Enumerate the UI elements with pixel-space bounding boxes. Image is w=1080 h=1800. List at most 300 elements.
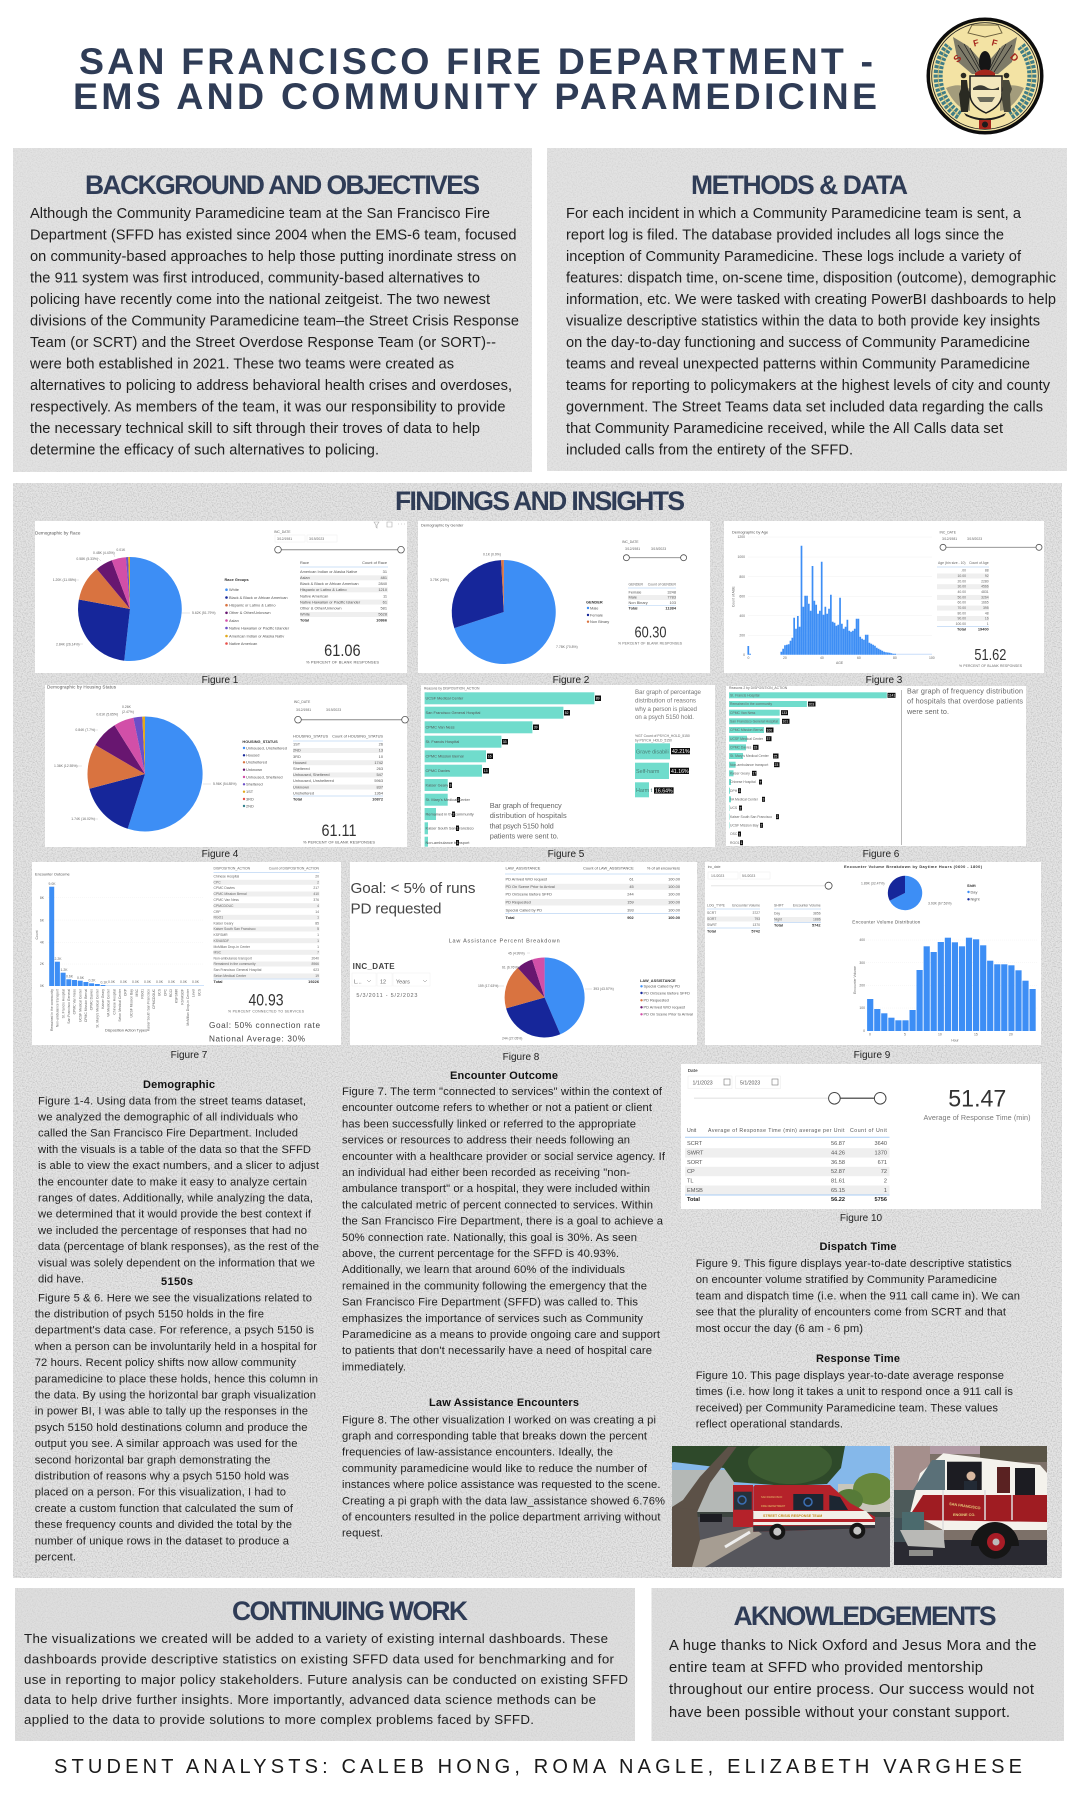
stat: 61.11 blank responses: % PERCENT OF BLANK RESPONSES bbox=[303, 840, 375, 845]
bar chart: disposition action types: RGO1 bbox=[141, 989, 145, 999]
date slicer: 3/19/2023 bbox=[309, 537, 324, 541]
date slicer: 3/12/1981 bbox=[625, 547, 640, 551]
text block: dispatch time: Figure 9. This figure displays year-to-date descriptive statistics bbox=[696, 1258, 1012, 1270]
figure 1: demographic by race dashboard: 5.62K (51.79%) bbox=[192, 611, 216, 615]
data table: law assistance: 902 bbox=[627, 915, 635, 920]
bar chart: encounter volume by hour bbox=[853, 938, 1038, 1042]
bar chart: overdose destinations bbox=[729, 692, 896, 845]
data table: age: 4566 bbox=[981, 585, 989, 589]
data table: age: 395 bbox=[983, 606, 989, 610]
figure 2: demographic by gender dashboard: 7.78K (70.8%) bbox=[556, 645, 578, 649]
text block: demographic: visual was solely dependent on the information that we bbox=[38, 1257, 315, 1269]
data table: age: Age (bin size - 10) bbox=[938, 561, 966, 565]
text block: law assistance: instances where police assistance was requested to the scene. bbox=[342, 1479, 660, 1491]
text block: demographic: we included the percentage of responses that had no bbox=[37, 1225, 307, 1237]
data table: shift: Day bbox=[774, 912, 780, 916]
bar chart: disposition action types: 9.0K bbox=[48, 882, 56, 886]
text block: acknowledgements: have been possible without your constant support. bbox=[669, 1705, 1010, 1721]
caption: figure 9: Figure 9 bbox=[854, 1050, 891, 1061]
data table: law assistance: 100.00 bbox=[668, 915, 680, 920]
legend: housing status: Unhoused, Unsheltered bbox=[246, 745, 287, 750]
text block: 5150s: percent. bbox=[35, 1552, 76, 1564]
histogram: age: 100 bbox=[929, 656, 935, 660]
data table: disposition: 85 bbox=[315, 922, 319, 926]
legend: law assistance: PD OnScene Before SFFD bbox=[644, 990, 690, 995]
histogram: age: 800 bbox=[739, 575, 745, 579]
text block: 5150s: 72 hours. Recent policy shifts now allow community bbox=[35, 1357, 296, 1369]
text block: encounter outcome: the San Francisco Fire Department, there is a goal to achieve a bbox=[342, 1216, 664, 1228]
data table: response time by unit: SWRT bbox=[687, 1151, 704, 1157]
text: law assistance goal bbox=[350, 880, 476, 918]
text block: acknowledgements: throughout our entire process. Our success would not bbox=[669, 1682, 1034, 1698]
data table: housing status: Total bbox=[293, 796, 302, 801]
heading: methods and data: METHODS & DATA bbox=[691, 170, 908, 200]
bar chart: hospital frequency: 52 bbox=[565, 711, 569, 715]
figure 2: demographic by gender dashboard: 0.1K (0.9%) bbox=[483, 552, 501, 556]
data table: disposition bbox=[214, 867, 320, 984]
bar chart: hospital frequency: CPMC Mission Bernal bbox=[426, 754, 464, 759]
data table: age: 1 bbox=[987, 622, 989, 626]
text: hospital bar graph note: distribution of hospitals bbox=[490, 811, 567, 820]
bar chart: disposition action types: KSFSMR bbox=[175, 988, 179, 1003]
data table: law assistance: PD Requested bbox=[506, 900, 531, 905]
text block: encounter outcome: above, the current percentage for the SFFD is 40.93%. bbox=[342, 1248, 619, 1260]
data table: disposition: San Francisco General Hospital bbox=[214, 968, 262, 972]
text: overdose bar graph note bbox=[906, 686, 1023, 716]
legend: gender: Male bbox=[590, 605, 598, 610]
histogram: age: 0 bbox=[748, 656, 750, 660]
data table: housing status: 837 bbox=[376, 784, 383, 789]
heading: demographic: Demographic bbox=[143, 1079, 215, 1091]
data table: housing status bbox=[293, 733, 384, 801]
data table: law assistance: % of all encounters bbox=[647, 866, 680, 870]
text block: law assistance: request. bbox=[342, 1528, 383, 1540]
date slicer: INC_DATE bbox=[294, 700, 311, 704]
data table: age: 90.00 bbox=[958, 617, 966, 621]
figure 5: psych 5150 hold bar charts: Reasons by DISPOSITION_ACTION bbox=[424, 686, 480, 690]
caption: figure 8: Figure 8 bbox=[503, 1052, 540, 1063]
data table: response time by unit: TL bbox=[687, 1179, 694, 1185]
bar chart: hospital frequency: Kaiser South San Francisco bbox=[426, 826, 474, 831]
text block: law assistance: graph and corresponding table that breaks down the percent bbox=[342, 1430, 648, 1442]
figure 5: psych 5150 hold bar charts bbox=[421, 685, 715, 847]
bar chart: overdose destinations: DPH bbox=[730, 789, 738, 793]
figure 7: encounter outcome dashboard bbox=[32, 862, 341, 1045]
data table: law assistance: 100.00 bbox=[668, 892, 681, 897]
data table: law assistance: PD On Scene Prior to Arrival bbox=[506, 884, 555, 889]
text block: encounter outcome: encounter with a healthcare provider or social service agency. If bbox=[342, 1151, 666, 1163]
panel: acknowledgements bbox=[652, 1588, 1064, 1741]
data table: disposition: 1 bbox=[317, 916, 319, 920]
caption: figure 5: Figure 5 bbox=[548, 849, 585, 860]
bar chart: hold reasons percent: %GT Count of PSYCH_HOLD_5150 bbox=[635, 734, 690, 738]
bar chart: disposition action types: Seton Medical Center bbox=[118, 988, 122, 1022]
bar chart: disposition action types: 0.5K bbox=[77, 976, 85, 980]
bar chart: hospital frequency: 39 bbox=[534, 726, 538, 730]
data table: shift: Total bbox=[774, 922, 783, 928]
text block: encounter outcome: ambulance transport" or a hospital, they were included within bbox=[342, 1183, 650, 1195]
data table: housing status: 547 bbox=[376, 772, 383, 777]
figure 4: demographic by housing status dashboard bbox=[45, 684, 408, 847]
bar chart: hospital frequency: 3 bbox=[450, 784, 452, 788]
figure 3: demographic by age dashboard bbox=[724, 521, 1044, 673]
bar chart: overdose destinations: OSC bbox=[730, 832, 738, 836]
panel: methods and data bbox=[547, 148, 1067, 471]
bar chart: disposition action types: Non-ambulance transport bbox=[56, 989, 60, 1027]
bar chart: encounter volume by hour: Hour bbox=[951, 1038, 960, 1042]
bar chart: overdose destinations: 2 bbox=[776, 815, 778, 819]
figure 3: demographic by age dashboard: Demographic by Age bbox=[732, 529, 768, 534]
figure 1: demographic by race dashboard: 0.58K (5.33%) bbox=[76, 557, 98, 561]
date slicer: 3/19/2023 bbox=[326, 708, 341, 712]
text block: background: the necessary technical skill to sift through their troves of data to help bbox=[30, 421, 480, 437]
bar chart: encounter volume by hour: 15 bbox=[974, 1032, 978, 1036]
bar chart: disposition action types: UCS bbox=[158, 988, 162, 996]
data table: disposition: Total bbox=[214, 979, 223, 984]
text block: encounter outcome bbox=[342, 1086, 666, 1373]
data table: housing status: Housed bbox=[293, 760, 306, 765]
bar chart: disposition action types: 0.2K bbox=[88, 978, 96, 982]
data table: response time by unit: SCRT bbox=[687, 1141, 703, 1147]
bar chart: disposition action types: CPMC Davies bbox=[90, 989, 94, 1010]
text block: continuing work: The visualizations we created will be added to a variety of existing internal dashboards. These bbox=[24, 1631, 608, 1646]
data table: disposition: 410 bbox=[313, 892, 319, 896]
text block: response time bbox=[696, 1370, 1013, 1431]
data table: race: Other & Other/Unknown bbox=[300, 606, 342, 611]
histogram: age: 80 bbox=[893, 656, 897, 660]
date slicer: 3/19/2023 bbox=[651, 547, 666, 551]
bar chart: overdose destinations: UCSF Mission Bay bbox=[730, 824, 759, 828]
text block: methods: report log is filed. The database provided includes all logs since the bbox=[566, 228, 1004, 244]
text block: methods: government. The Street Teams data set included data regarding the calls bbox=[566, 400, 1043, 416]
data table: log type: 5742 bbox=[751, 928, 761, 933]
text: reasons bar graph note: on a psych 5150 hold. bbox=[635, 714, 694, 721]
bar chart: hospital frequency: St. Francis Hospital bbox=[426, 739, 459, 744]
bar chart: disposition action types: 0.0K bbox=[168, 980, 176, 984]
date slicer: 5/1/2023 bbox=[740, 1080, 760, 1086]
stat: 51.47 average response time bbox=[924, 1086, 1030, 1122]
text block: 5150s: number of unique rows in the dataset to produce a bbox=[35, 1535, 290, 1547]
photo: street crisis response ambulance: FIRE DEPARTMENT bbox=[761, 1504, 786, 1508]
pie chart: gender bbox=[452, 560, 556, 664]
legend: race groups: Race Groups bbox=[224, 577, 249, 582]
figure 4: demographic by housing status dashboard: 0.84K (7.7%) bbox=[75, 728, 95, 732]
bar chart: disposition action types: 4K bbox=[40, 940, 45, 944]
data table: race: Asian bbox=[300, 575, 310, 580]
data table: race: Count of Race bbox=[362, 560, 387, 565]
text block: methods: visualize descriptive statistics within the data to both provide key insights bbox=[566, 314, 1040, 330]
bar chart: disposition action types: 0.0K bbox=[132, 980, 140, 984]
caption: figure 7: Figure 7 bbox=[171, 1050, 208, 1061]
data table: gender bbox=[628, 582, 677, 611]
data table: log type: 1370 bbox=[752, 923, 760, 927]
histogram: age: 400 bbox=[739, 614, 745, 618]
text block: response time: times (i.e. how long it takes a unit to respond once a 911 call is bbox=[696, 1386, 1013, 1398]
text: reasons bar graph note: why a person is placed bbox=[634, 706, 698, 713]
bar chart: overdose destinations: CPMC Van Ness bbox=[730, 711, 756, 715]
bar chart: overdose destinations: VA Medical Center bbox=[730, 798, 759, 802]
text block: demographic: we determined that it would provide the best context if bbox=[37, 1209, 312, 1221]
data table: disposition: CPMCDOUC bbox=[214, 904, 234, 908]
bar chart: disposition action types: UCS bbox=[197, 988, 201, 996]
data table: disposition: CRP bbox=[214, 910, 221, 914]
data table: response time by unit: 671 bbox=[878, 1160, 887, 1166]
legend: housing status: HOUSING_STATUS bbox=[242, 739, 278, 744]
data table: disposition: Remained in the community bbox=[214, 962, 256, 966]
data table: response time by unit: 65.15 bbox=[831, 1188, 845, 1194]
data table: housing status: 13 bbox=[379, 748, 383, 753]
text block: 5150s: paramedicine to place these holds, hence this column in bbox=[35, 1373, 318, 1385]
date slicer: INC_DATE bbox=[622, 540, 639, 544]
data table: disposition: CPC bbox=[214, 880, 221, 884]
data table: law assistance bbox=[505, 866, 681, 920]
heading: law assistance encounters: Law Assistance Encounters bbox=[429, 1397, 579, 1409]
figure 9: encounter volume dashboard: Encounter Volume Distribution bbox=[852, 920, 921, 924]
bar chart: hold reasons percent: Grave disabili bbox=[636, 749, 669, 755]
stat: 61.11 blank responses bbox=[303, 822, 375, 845]
photo: street crisis response ambulance: STREET CRISIS RESPONSE TEAM bbox=[763, 1514, 822, 1518]
data table: law assistance: 100.00 bbox=[668, 900, 681, 905]
bar chart: overdose destinations: Remained in the community bbox=[730, 702, 772, 706]
stat: 60.30 blank responses: 60.30 bbox=[634, 625, 667, 642]
legend: shift: Night bbox=[970, 897, 981, 902]
data table: law assistance: 393 bbox=[627, 907, 634, 912]
figure 9: encounter volume dashboard: 1.89K (32.47%) bbox=[861, 882, 885, 886]
data table: disposition: 217 bbox=[313, 886, 319, 890]
text block: methods bbox=[566, 206, 1056, 458]
bar chart: overdose destinations: 3 bbox=[762, 798, 764, 802]
text block: demographic: did have. bbox=[38, 1274, 84, 1286]
stat: 61.11 blank responses: 61.11 bbox=[322, 822, 356, 840]
data table: disposition: 8966 bbox=[311, 962, 319, 966]
text block: 5150s: when a person can be involuntarily held in a hospital for bbox=[34, 1341, 317, 1353]
text: connection goal: Goal: 50% connection rate bbox=[209, 1021, 320, 1030]
text block: demographic: with the visuals is a table of the data so that the SFFD bbox=[37, 1144, 311, 1156]
data table: age: 70.00 bbox=[958, 606, 966, 610]
data table: log type: Encounter Volume bbox=[732, 903, 760, 907]
date filter: INC_DATE: Years bbox=[396, 980, 410, 986]
caption: figure 3: Figure 3 bbox=[866, 675, 903, 686]
data table: housing status: Unhoused, Unsheltered bbox=[293, 778, 334, 783]
text block: 5150s: department's data case. For reference, a psych 5150 is bbox=[35, 1325, 314, 1337]
bar chart: overdose destinations: 100 bbox=[766, 728, 772, 732]
bar chart: hospital frequency: St. Mary's Medical Center bbox=[426, 797, 471, 802]
legend: housing status: Unknown bbox=[246, 767, 262, 772]
stat: 40.93 connected to services bbox=[228, 991, 305, 1013]
data table: response time by unit bbox=[685, 1128, 890, 1203]
figure 8: law assistance dashboard: 45 (4.99%) bbox=[508, 952, 525, 956]
text block: 5150s: in power BI, I was able to tally up the responses in the bbox=[35, 1406, 308, 1418]
data table: shift: Encounter Volume bbox=[793, 903, 821, 907]
data table: disposition: 19226 bbox=[308, 979, 320, 984]
bar chart: overdose destinations: St. Francis Hospital bbox=[730, 694, 760, 698]
histogram: age: 600 bbox=[739, 594, 745, 598]
data table: disposition: 1 bbox=[317, 939, 319, 943]
bar chart: disposition action types: MSC bbox=[135, 988, 139, 997]
pie chart: law assistance bbox=[505, 957, 585, 1038]
text block: dispatch time: team and dispatch time (i.e. when the 911 call came in). We can bbox=[696, 1290, 1020, 1302]
text block: law assistance: frequencies of law-assistance encounters. Ideally, the bbox=[342, 1447, 613, 1459]
data table: housing status: 5963 bbox=[374, 778, 383, 783]
text block: encounter outcome: San Francisco Fire Department (SFFD) was called to. This bbox=[342, 1297, 638, 1309]
caption: figure 10: Figure 10 bbox=[840, 1213, 883, 1224]
figure 8: law assistance dashboard: 159 (17.63%) bbox=[478, 984, 498, 988]
heading: 5150s: 5150s bbox=[161, 1276, 193, 1288]
text block: 5150s: second horizontal bar graph demonstrating the bbox=[35, 1454, 271, 1466]
data table: law assistance: Count of LAW_ASSISTANCE bbox=[583, 866, 634, 870]
data table: housing status: Sheltered bbox=[293, 766, 310, 771]
data table: disposition: CPMC Davies bbox=[214, 886, 235, 890]
bar chart: hospital frequency: San Francisco General Hospital bbox=[426, 710, 481, 715]
data table: response time by unit: Unit bbox=[687, 1128, 697, 1134]
data table: disposition: Non-ambulance transport bbox=[214, 956, 252, 960]
bar chart: overdose destinations: CPMC Davies bbox=[730, 746, 752, 750]
date slicer: Date bbox=[688, 1068, 698, 1073]
data table: race: 1210 bbox=[378, 587, 388, 592]
stat: 51.62 blank responses: 51.62 bbox=[974, 647, 1006, 664]
bar chart: encounter volume by hour: 20 bbox=[1009, 1032, 1013, 1036]
date filter: INC_DATE bbox=[352, 962, 430, 999]
legend: gender bbox=[586, 599, 609, 624]
bar chart: disposition action types: Chinese Hospital bbox=[112, 989, 116, 1015]
data table: log type: SWRT bbox=[707, 923, 717, 927]
figure 4: demographic by housing status dashboard: 0.26K bbox=[122, 705, 132, 709]
data table: log type: Total bbox=[707, 928, 716, 933]
text block: background: on community-based approaches to help those putting inordinate stress on bbox=[30, 249, 516, 265]
data table: race: 61 bbox=[383, 599, 387, 604]
bar chart: disposition action types: CPMC Mission Bernal bbox=[84, 989, 88, 1022]
data table: housing status: Unhoused, Sheltered bbox=[293, 772, 330, 777]
date slicer: inc_date bbox=[708, 865, 721, 869]
text block: encounter outcome: has been successfully linked or referred to the appropriate bbox=[342, 1118, 636, 1130]
legend: housing status: Housed bbox=[246, 753, 259, 758]
data table: gender: 3248 bbox=[667, 590, 676, 595]
title bbox=[73, 40, 877, 117]
text block: encounter outcome: the calculated metric of percent connected to services. Within bbox=[342, 1199, 653, 1211]
text block: continuing work: applied to the data to provide solutions to more complex problems faced by SFFD. bbox=[24, 1712, 534, 1727]
text block: encounter outcome: emphasizes the importance of services such as Community bbox=[342, 1313, 643, 1325]
text block: encounter outcome: an individual had either been recorded as receiving "non- bbox=[342, 1167, 630, 1179]
data table: response time by unit: 5756 bbox=[875, 1197, 887, 1203]
panel: findings and insights bbox=[13, 483, 1062, 1578]
title: SAN FRANCISCO FIRE DEPARTMENT - bbox=[79, 40, 873, 82]
text block: methods: included calls from the entirety of the SFFD. bbox=[566, 442, 853, 458]
text block: demographic bbox=[37, 1095, 320, 1286]
text block: methods: inception of Community Paramedicine. These logs include a variety of bbox=[566, 249, 1022, 265]
histogram: age: 20 bbox=[783, 656, 787, 660]
text block: encounter outcome: to patients that don't necessarily have a need of hospital care bbox=[342, 1345, 652, 1357]
bar chart: hold reasons percent: Harm t bbox=[636, 788, 653, 794]
text block: background: were both established in 2021. These two teams were created as bbox=[29, 356, 454, 372]
data table: response time by unit: 3640 bbox=[875, 1141, 887, 1147]
bar chart: disposition action types: Kaiser South San Francisco bbox=[146, 989, 150, 1031]
data table: housing status: 263 bbox=[376, 766, 383, 771]
data table: age: 80.00 bbox=[958, 612, 966, 616]
legend: housing status: 2ND bbox=[246, 803, 254, 808]
icon: SFFD seal logo: F bbox=[972, 37, 980, 49]
text block: continuing work: data to help drive further insights. More importantly, advanced data science methods can be bbox=[24, 1692, 596, 1707]
data table: disposition: 5 bbox=[317, 927, 319, 931]
date slicer: 3/12/1981 bbox=[942, 537, 957, 541]
stat: 40.93 connected to services: 40.93 bbox=[248, 991, 284, 1009]
photo: street crisis response ambulance: SAN FRANCISCO bbox=[761, 1495, 782, 1499]
data table: response time by unit: 1 bbox=[884, 1188, 887, 1194]
data table: race: Total bbox=[300, 618, 309, 623]
data table: housing status: 1364 bbox=[374, 790, 384, 795]
data table: age: 20.00 bbox=[958, 579, 966, 583]
date slicer bbox=[622, 540, 687, 561]
text block: background: alternatives to policing to address behavioral health crises and overdoses, bbox=[30, 378, 512, 394]
histogram: age: 0 bbox=[743, 653, 745, 657]
figure 9: encounter volume dashboard bbox=[705, 862, 1041, 1045]
figure 8: law assistance dashboard bbox=[350, 862, 697, 1045]
data table: gender: GENDER bbox=[628, 582, 644, 586]
text block: demographic: called the San Francisco Fire Department. Included bbox=[38, 1128, 298, 1140]
bar chart: overdose destinations: Kaiser South San Francisco bbox=[730, 815, 772, 819]
bar chart: encounter volume by hour: 100 bbox=[859, 1006, 865, 1010]
text block: methods: teams for reporting to policymakers at the highest levels of city and county bbox=[566, 378, 1051, 394]
stat: 61.06 blank responses: % PERCENT OF BLANK RESPONSES bbox=[306, 660, 379, 664]
data table: response time by unit: 56.22 bbox=[831, 1197, 845, 1203]
figure 10: response time dashboard bbox=[681, 1064, 1041, 1209]
bar chart: hospital frequency: 2 bbox=[458, 798, 460, 802]
date slicer bbox=[708, 865, 832, 889]
photo: street crisis response ambulance bbox=[645, 1440, 893, 1567]
text: connection goal bbox=[209, 1021, 320, 1044]
bar chart: hospital frequency: 89 bbox=[596, 696, 600, 700]
data table: shift: 5742 bbox=[812, 922, 821, 928]
text block: 5150s: Figure 5 & 6. Here we see the visualizations related to bbox=[38, 1292, 312, 1304]
legend: housing status: 1ST bbox=[246, 789, 254, 794]
data table: age: 30.00 bbox=[958, 585, 966, 589]
bar chart: disposition action types: Count bbox=[35, 930, 39, 940]
data table: race: 581 bbox=[380, 606, 387, 611]
bar chart: overdose destinations: RGO1 bbox=[730, 841, 740, 845]
data table: law assistance: 244 bbox=[627, 892, 635, 897]
data table: age: 1665 bbox=[981, 601, 989, 605]
data table: response time by unit: Average of Response Time (min) average per Unit bbox=[708, 1128, 845, 1134]
legend: law assistance bbox=[640, 978, 693, 1017]
bar chart: overdose destinations: 37 bbox=[766, 737, 770, 741]
legend: gender: Female bbox=[590, 612, 603, 617]
text block: dispatch time: on encounter volume stratified by Community Paramedicine bbox=[696, 1274, 997, 1286]
heading: background and objectives: BACKGROUND AND OBJECTIVES bbox=[85, 170, 480, 200]
legend: law assistance: LAW_ASSISTANCE bbox=[640, 978, 676, 983]
data table: disposition: Seton Medical Center bbox=[214, 974, 247, 978]
text block: encounter outcome: Paramedicine as a means to provide ongoing care and support bbox=[342, 1329, 661, 1341]
legend: race groups: Other & Other/Unknown bbox=[229, 610, 271, 615]
text: hospital bar graph note: Bar graph of frequency bbox=[490, 801, 562, 810]
data table: response time by unit: CP bbox=[687, 1169, 695, 1175]
panel: continuing work bbox=[15, 1588, 635, 1741]
bar chart: overdose destinations: 2 bbox=[760, 824, 762, 828]
data table: disposition: 4 bbox=[317, 904, 319, 908]
text block: encounter outcome: services or resources to address their needs following an bbox=[342, 1135, 630, 1147]
bar chart: overdose destinations: UCS bbox=[730, 806, 738, 810]
histogram: age bbox=[732, 535, 935, 665]
data table: shift bbox=[774, 903, 821, 928]
data table: response time by unit: 81.61 bbox=[831, 1179, 845, 1185]
bar chart: overdose destinations: 23 bbox=[774, 763, 778, 767]
bar chart: hold reasons percent: 41.16% bbox=[671, 769, 689, 775]
date slicer: INC_DATE bbox=[274, 530, 291, 534]
legend: race groups: American Indian or Alaska Nativ bbox=[229, 633, 284, 638]
bar chart: disposition action types: 0.0K bbox=[120, 980, 128, 984]
figure 8: law assistance dashboard: 393 (43.57%) bbox=[593, 987, 614, 991]
bar chart: hold reasons percent: 42.21% bbox=[672, 749, 690, 755]
text block: methods: that Community Paramedicine received, while the All Calls data set bbox=[566, 421, 1003, 437]
data table: disposition: Chinese Hospital bbox=[214, 874, 239, 878]
